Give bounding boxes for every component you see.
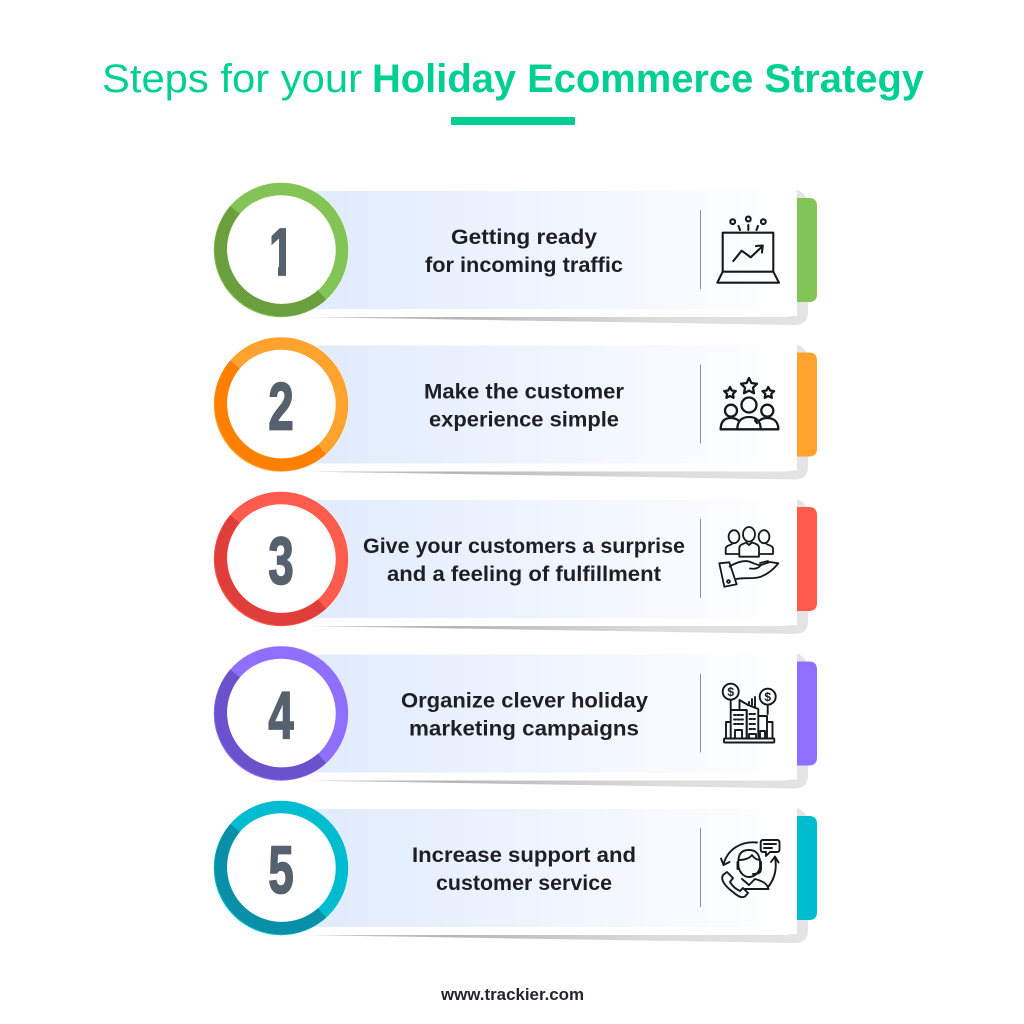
step 4 (214, 646, 817, 788)
step 5 (214, 800, 817, 943)
step 3 (214, 492, 817, 634)
step 1 number badge: 1 (269, 215, 294, 290)
icon: customers with stars (721, 378, 778, 429)
footer website: www.trackier.com (440, 985, 584, 1004)
step 5 text: Increase support and (412, 844, 636, 867)
step 5 text (412, 844, 636, 895)
title: Holiday Ecommerce Strategy (372, 57, 925, 101)
step 2 number badge: 2 (268, 370, 294, 445)
icon: laptop with rising chart (717, 217, 779, 283)
step 2 card (300, 344, 817, 480)
step 4 card (300, 654, 817, 788)
step 3 number badge: 3 (268, 524, 294, 599)
step 3 number badge (214, 492, 348, 626)
step 5 text: customer service (436, 872, 612, 895)
step 4 number badge: 4 (268, 679, 294, 754)
step 3 text (363, 535, 685, 586)
step 1 (214, 182, 817, 325)
icon: buildings with dollar coins: $ (764, 690, 771, 704)
step 2 text: Make the customer (424, 380, 624, 404)
step 2 text (424, 380, 624, 432)
step 1 card (300, 190, 817, 325)
step 5 number badge: 5 (268, 833, 294, 908)
icon: customer support agent (721, 840, 780, 897)
step 1 text: Getting ready (451, 226, 597, 249)
step 5 number badge (214, 800, 348, 936)
step 4 text (401, 690, 648, 740)
step 3 card (300, 499, 817, 634)
step 1 text (425, 226, 623, 277)
step 1 number badge (214, 182, 348, 318)
step 4 number badge (214, 646, 348, 781)
step 3 text: and a feeling of fulfillment (387, 563, 661, 586)
icon: buildings with dollar coins: $ (727, 685, 734, 699)
step 3 text: Give your customers a surprise (363, 535, 685, 558)
title (102, 57, 925, 101)
title underline (451, 117, 575, 125)
icon: buildings with dollar coins (723, 684, 776, 742)
icon: hand holding customers (719, 527, 778, 587)
step 5 card (300, 808, 817, 943)
step 2 number badge (214, 337, 348, 472)
step 2 (214, 337, 817, 480)
step 4 text: Organize clever holiday (401, 690, 648, 712)
title: Steps for your (102, 57, 362, 101)
step 4 text: marketing campaigns (409, 718, 639, 740)
step 2 text: experience simple (429, 408, 619, 432)
step 1 text: for incoming traffic (425, 254, 623, 277)
